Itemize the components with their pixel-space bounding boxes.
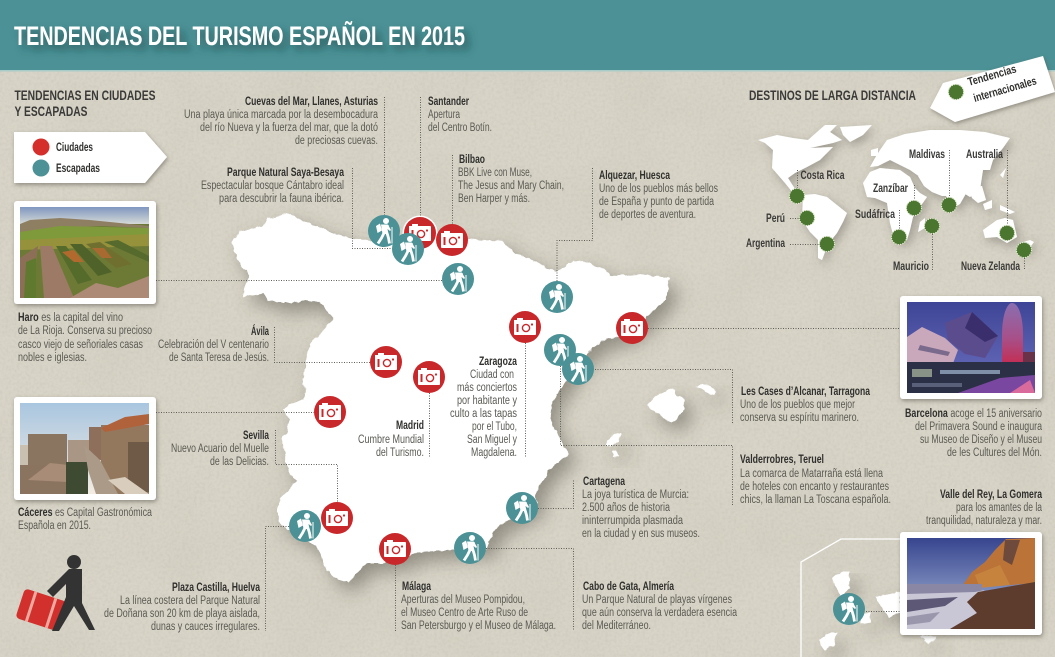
label: Málaga: el Museo Centro de Arte Ruso de (401, 607, 528, 619)
marker: Maldivas (941, 197, 957, 213)
label: Cuevas del Mar: Una playa única marcada por la desembocadura (184, 109, 378, 121)
label: Zaragoza: culto a las tapas (450, 408, 517, 420)
label: Zaragoza: más conciertos (457, 382, 517, 394)
caption: Cáceres (18, 507, 152, 532)
label: Cartagena: 2.500 años de historia (582, 502, 670, 514)
map of the Canary Islands inset (801, 539, 937, 657)
icon: camera, Santander (402, 216, 438, 250)
label: Zaragoza (450, 356, 517, 459)
photo: Haro vineyard (14, 201, 156, 304)
label: Parque Natural Saya-Besaya: Parque Natural Saya-Besaya (227, 167, 344, 179)
title: TENDENCIAS DEL TURISMO ESPAÑOL EN 2015 (14, 20, 465, 51)
world map labels: Mauricio (893, 261, 929, 273)
icon: camera, Sevilla (321, 502, 353, 534)
icon: camera, Madrid (413, 361, 445, 393)
label: Bilbao (458, 154, 564, 205)
label: Bilbao: Bilbao (459, 154, 485, 166)
label: Bilbao: The Jesus and Mary Chain, (458, 180, 564, 192)
label: Plaza Castilla, Huelva: La línea costera del Parque Natural (120, 595, 260, 607)
label: Santander (428, 96, 492, 134)
world map labels: Sudáfrica (855, 209, 895, 221)
icon: hiker, Saya-Besaya (392, 233, 424, 265)
label: Les Cases d'Alcanar: Uno de los pueblos que mejor (740, 399, 855, 411)
label: Alquezar: de España y punto de partida (599, 196, 714, 208)
label: Ávila (158, 325, 269, 364)
icon: camera, Ávila (370, 346, 402, 378)
label: Plaza Castilla, Huelva: de Doñana son 20 km de playa aislada, (104, 608, 260, 620)
marker: Mauricio (924, 218, 940, 234)
caption: Barcelona (905, 408, 1042, 459)
legend (14, 132, 167, 183)
marker: Perú (799, 210, 815, 226)
label: Cuevas del Mar: del río Nueva y la fuerza del mar, que la dotó (200, 122, 378, 134)
world map labels: Perú (766, 213, 785, 225)
caption: Haro (18, 312, 152, 364)
label: Santander: Santander (428, 96, 469, 108)
label: Parque Natural Saya-Besaya (201, 167, 344, 205)
photo: La Gomera (900, 532, 1042, 635)
photo: Cáceres (14, 397, 156, 500)
label: Zaragoza: por habitante y (457, 395, 517, 407)
icon: camera, Cáceres (314, 396, 346, 428)
Balearic islands (605, 384, 716, 457)
label: Plaza Castilla, Huelva: Plaza Castilla, Huelva (172, 582, 260, 594)
label: Valderrobres: La comarca de Matarraña está llena (740, 468, 883, 480)
world map (758, 125, 1034, 260)
label: Zaragoza: Ciudad con (470, 369, 514, 381)
label: Alquezar (599, 170, 718, 221)
label: Les Cases d'Alcanar: conserva su espíritu marinero. (740, 412, 859, 424)
label: Zaragoza: por el Tubo, (472, 421, 517, 433)
label: Bilbao: Ben Harper y más. (458, 193, 530, 205)
label: Valderrobres (740, 454, 891, 506)
caption: Haro: de La Rioja. Conserva su precioso (18, 325, 152, 337)
label: Cuevas del Mar: Cuevas del Mar, Llanes, Asturias (245, 96, 378, 108)
icon: camera, Málaga (379, 533, 411, 565)
map of Spain (232, 213, 716, 583)
icon: hiker, La Gomera (833, 593, 865, 625)
label: Cabo de Gata: Un Parque Natural de playas vírgenes (582, 594, 732, 606)
icon: camera, Bilbao (436, 224, 468, 256)
label: Cartagena: Cartagena (583, 476, 625, 488)
label: Alquezar: Alquezar, Huesca (599, 170, 670, 182)
label: Les Cases d'Alcanar: Les Cases d’Alcanar, Tarragona (741, 386, 870, 398)
label: Santander: Apertura (428, 109, 460, 121)
label: Valderrobres: chics, la llaman La Toscana española. (740, 494, 891, 506)
label: Madrid: Cumbre Mundial (358, 434, 424, 446)
photo: Barcelona (900, 296, 1042, 399)
label: Parque Natural Saya-Besaya: Espectacular bosque Cántabro ideal (201, 180, 344, 192)
caption: Cáceres: Española en 2015. (18, 520, 91, 532)
marker: Argentina (819, 236, 835, 252)
icon: hiker, Alquezar (541, 281, 573, 313)
label: Sevilla (171, 430, 269, 468)
label: Cabo de Gata (582, 581, 737, 632)
label: Valle del Rey (926, 489, 1042, 527)
header band (0, 0, 1055, 72)
label: Zaragoza: Magdalena. (471, 447, 517, 459)
caption: Haro: casco viejo de señoriales casas (18, 339, 143, 351)
label: Cartagena: La joya turística de Murcia: (582, 489, 689, 501)
icon: hiker, Cartagena (506, 492, 538, 524)
leader lines (156, 97, 1024, 631)
label: Cabo de Gata: Cabo de Gata, Almería (583, 581, 674, 593)
caption: Haro: Haro es la capital del vino (18, 312, 123, 324)
label: Sevilla: Nuevo Acuario del Muelle (171, 443, 269, 455)
tag: tendencias internacionales: Tendencias (966, 63, 1018, 89)
world map labels: Zanzíbar (873, 183, 908, 195)
label: Cartagena: ininterrumpida plasmada (582, 515, 683, 527)
label: Bilbao: BBK Live con Muse, (458, 167, 532, 179)
legend: Ciudades (56, 142, 93, 154)
label: Zaragoza: San Miguel y (467, 434, 517, 446)
label: Cartagena (582, 476, 700, 540)
label: Cuevas del Mar (184, 96, 378, 147)
label: Ávila: Celebración del V centenario (158, 339, 269, 351)
icon: hiker, Haro (442, 263, 474, 295)
world map labels: Australia (966, 149, 1003, 161)
label: Sevilla: de las Delicias. (210, 456, 269, 468)
marker: Nueva Zelanda (1016, 242, 1032, 258)
icon: hiker, Les Cases (562, 353, 594, 385)
world map labels (746, 149, 1020, 273)
tag: tendencias internacionales (930, 56, 1055, 122)
heading: tendencias en ciudades y escapadas: Y ESCAPADAS (14, 103, 88, 119)
heading: tendencias en ciudades y escapadas: TENDENCIAS EN CIUDADES (14, 87, 156, 103)
label: Cabo de Gata: del Mediterráneo. (582, 620, 651, 632)
label: Valderrobres: de hoteles con encanto y restaurantes (740, 481, 889, 493)
label: Santander: del Centro Botín. (428, 122, 492, 134)
tag: tendencias internacionales: internacionales (972, 75, 1038, 105)
label: Alquezar: Uno de los pueblos más bellos (599, 183, 718, 195)
label: Valderrobres: Valderrobres, Teruel (740, 454, 824, 466)
icon: hiker, Cabo de Gata (454, 532, 486, 564)
icon: hiker, Cuevas del Mar (368, 215, 400, 247)
label: Cuevas del Mar: de preciosas cuevas. (295, 135, 378, 147)
icon: hiker, Valderrobres (544, 334, 576, 366)
label: Ávila: Ávila (251, 325, 269, 338)
label: Plaza Castilla, Huelva: dunas y cauces irregulares. (151, 621, 260, 633)
world map labels: Argentina (746, 238, 785, 250)
world map labels: Nueva Zelanda (961, 261, 1020, 273)
label: Málaga: San Petersburgo y el Museo de Málaga. (401, 620, 556, 632)
icon: camera, Barcelona (616, 312, 648, 344)
icon: traveller with suitcase (15, 555, 95, 631)
label: Madrid: Madrid (396, 420, 424, 432)
world map labels: Costa Rica (800, 170, 845, 182)
icon: hiker, Huelva (289, 510, 321, 542)
label: Málaga (401, 581, 556, 632)
marker: Australia (999, 225, 1015, 241)
marker: Sudáfrica (891, 229, 907, 245)
marker: Zanzíbar (906, 200, 922, 216)
label: Málaga: Aperturas del Museo Pompidou, (401, 594, 525, 606)
world map labels: Maldivas (909, 149, 945, 161)
label: Cabo de Gata: que aún conserva la verdadera esencia (582, 607, 737, 619)
heading: tendencias en ciudades y escapadas (14, 87, 156, 119)
label: Zaragoza: Zaragoza (479, 356, 517, 368)
marker: Costa Rica (789, 188, 805, 204)
heading: destinos de larga distancia: DESTINOS DE LARGA DISTANCIA (749, 87, 916, 103)
label: Madrid: del Turismo. (376, 447, 424, 459)
label: Sevilla: Sevilla (243, 430, 269, 442)
label: Madrid (358, 420, 424, 459)
label: Parque Natural Saya-Besaya: para descubrir la fauna ibérica. (219, 193, 344, 205)
label: Ávila: de Santa Teresa de Jesús. (169, 352, 269, 364)
label: Les Cases d'Alcanar (740, 386, 870, 424)
legend: Escapadas (56, 163, 100, 175)
caption: Haro: nobles e iglesias. (18, 352, 87, 364)
label: Plaza Castilla, Huelva (104, 582, 260, 633)
icon: camera, Zaragoza (509, 311, 541, 343)
caption: Cáceres: Cáceres es Capital Gastronómica (18, 507, 152, 519)
label: Alquezar: de deportes de aventura. (599, 209, 696, 221)
label: Cartagena: en la ciudad y en sus museos. (582, 528, 700, 540)
label: Málaga: Málaga (402, 581, 431, 593)
